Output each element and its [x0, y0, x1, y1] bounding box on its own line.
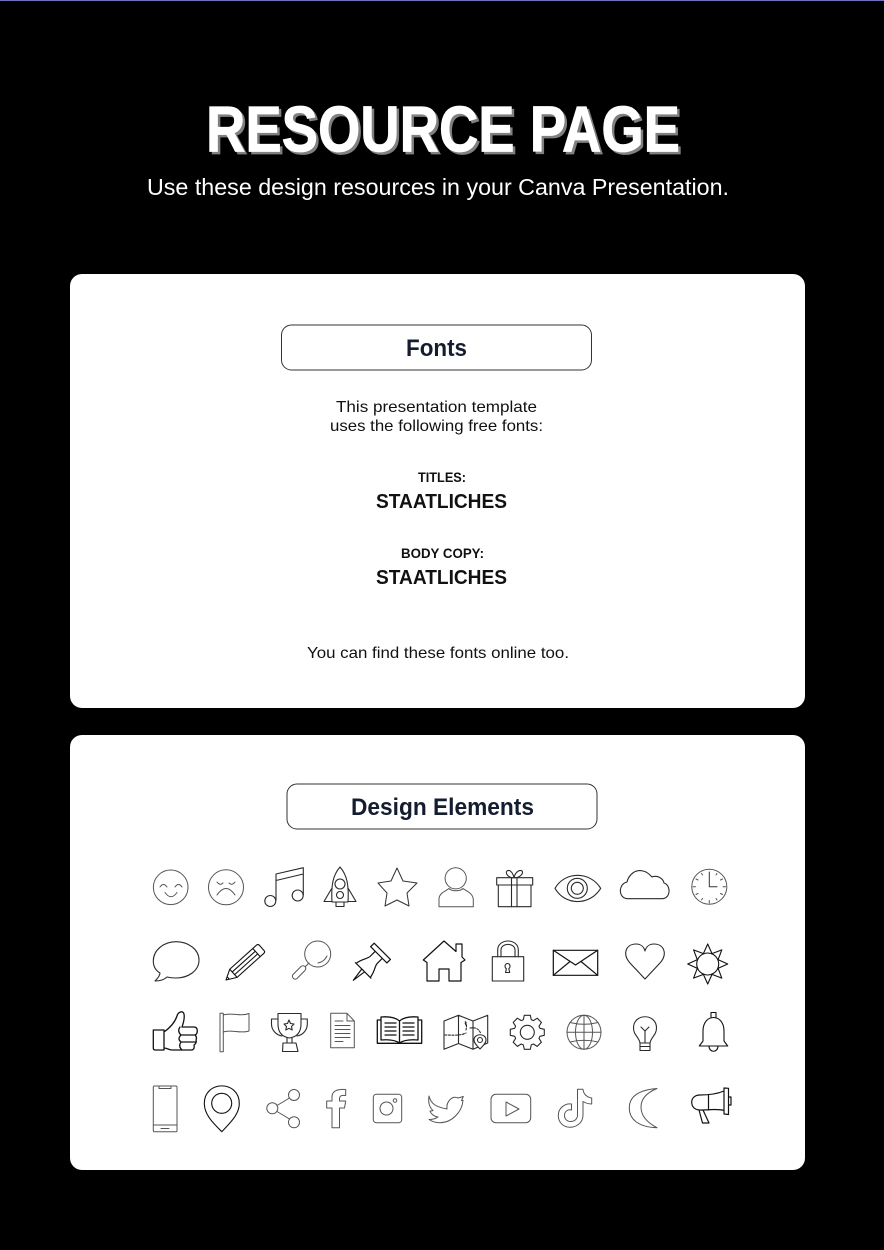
icon: house — [423, 941, 465, 981]
icon: light bulb — [634, 1017, 656, 1050]
heading: fonts: Fonts — [406, 335, 467, 362]
icon: envelope — [553, 950, 598, 975]
icon: speech bubble — [153, 942, 199, 981]
icon: cloud — [620, 871, 669, 899]
titles font: TITLES: — [418, 469, 466, 485]
footer note: You can find these fonts online too. — [307, 645, 569, 662]
intro text: This presentation template — [336, 399, 537, 416]
icon: thumbs up — [153, 1012, 197, 1050]
icon: smile — [153, 870, 188, 905]
icon: star — [378, 868, 417, 906]
icon: flag — [220, 1013, 249, 1052]
icon: crescent moon — [629, 1088, 657, 1128]
icon: map pin — [204, 1086, 239, 1132]
intro text: uses the following free fonts: — [330, 418, 543, 435]
titles font: STAATLICHES — [376, 491, 507, 513]
icon: globe — [567, 1015, 601, 1049]
icon: trophy — [272, 1014, 307, 1052]
heading: design elements — [287, 784, 597, 829]
icon: gift — [497, 870, 533, 907]
icon: youtube — [491, 1094, 531, 1123]
panel: design elements — [70, 735, 805, 1170]
title: RESOURCE PAGE — [208, 95, 682, 168]
icon: open book — [377, 1017, 422, 1043]
subtitle: Use these design resources in your Canva Presentation. — [147, 174, 729, 200]
body copy font: BODY COPY: — [401, 545, 484, 561]
icon: pencil — [222, 944, 265, 984]
icon: share — [267, 1090, 300, 1128]
heading: design elements: Design Elements — [351, 794, 534, 821]
icon: bell — [699, 1012, 728, 1051]
icon: folding map — [444, 1015, 488, 1049]
icon: phone — [153, 1086, 177, 1132]
icon: twitter — [429, 1096, 463, 1123]
icon: sun — [688, 944, 728, 984]
body copy font: STAATLICHES — [376, 567, 507, 589]
heading: fonts — [282, 325, 592, 370]
icon: facebook — [327, 1089, 346, 1128]
icon: clock — [692, 869, 727, 904]
icon: music note — [265, 868, 303, 906]
icon: gear — [510, 1015, 544, 1049]
icon: magnifier — [292, 941, 331, 979]
icon: padlock — [492, 941, 524, 981]
icon: push pin — [345, 943, 390, 988]
icon: person — [439, 868, 473, 907]
panel: fonts — [70, 274, 805, 708]
title: RESOURCE PAGE — [206, 92, 680, 166]
intro text — [330, 399, 543, 435]
icon: tiktok — [558, 1089, 592, 1127]
icon: instagram — [373, 1094, 402, 1123]
icon: rocket — [324, 867, 356, 906]
icon: document — [331, 1013, 354, 1048]
icon: megaphone — [692, 1088, 731, 1123]
icon: eye — [555, 875, 601, 902]
titles font — [376, 469, 507, 513]
icon: heart — [626, 944, 664, 979]
icon: sad face — [208, 870, 244, 905]
body copy font — [376, 545, 507, 589]
